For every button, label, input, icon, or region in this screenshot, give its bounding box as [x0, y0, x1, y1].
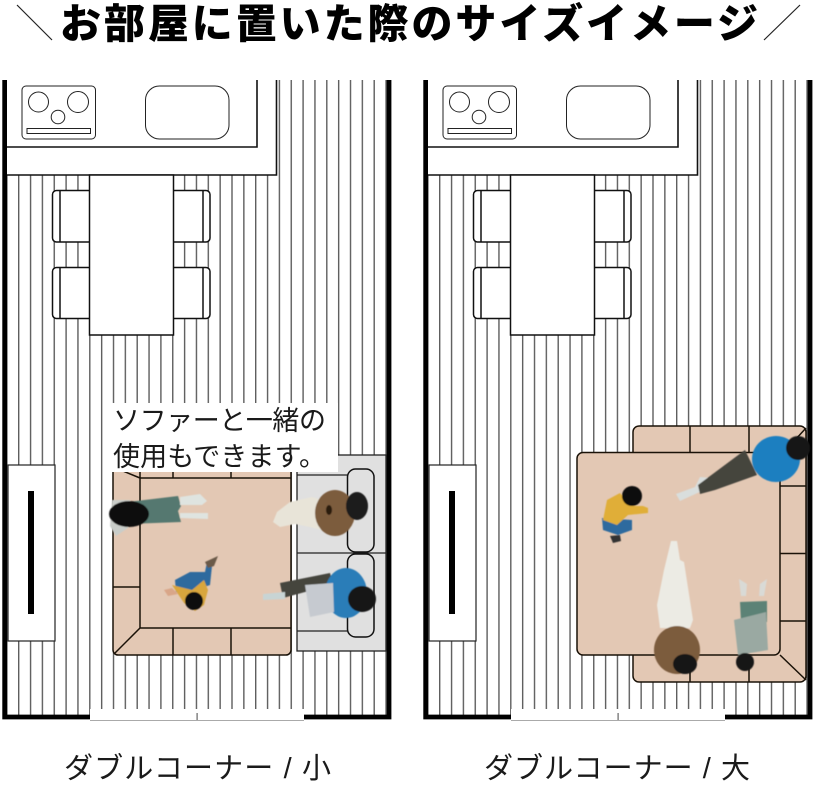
person: woman lying on rug — [109, 494, 208, 536]
tv unit — [8, 465, 55, 641]
kitchen counter — [7, 80, 276, 175]
panel: floor plan large — [426, 80, 810, 721]
dining table — [510, 175, 594, 335]
person: woman on sofa — [273, 490, 368, 536]
person: child on large rug — [602, 486, 648, 543]
dining chairs — [52, 190, 210, 318]
kitchen counter — [428, 80, 698, 175]
walls — [5, 80, 389, 717]
icon: sink — [566, 86, 650, 139]
caption: small: ダブルコーナー / 小 — [64, 752, 331, 785]
dining table — [90, 175, 174, 335]
callout: ソファーと一緒の — [113, 406, 326, 436]
person: woman lying on large rug — [734, 579, 768, 671]
callout — [109, 403, 338, 472]
dining chairs — [474, 190, 631, 318]
walls — [426, 80, 810, 717]
door opening — [90, 709, 304, 721]
rug: large — [577, 426, 806, 682]
icon: stove — [443, 86, 516, 139]
person: man lying on rug — [676, 436, 810, 501]
tv unit — [429, 465, 476, 641]
person: man on sofa — [263, 568, 376, 618]
panel: floor plan small — [5, 80, 389, 721]
door opening — [511, 709, 725, 721]
floor boards — [7, 80, 387, 715]
sofa — [297, 455, 386, 651]
rug: small — [113, 462, 291, 655]
person: woman sitting on large rug — [654, 541, 700, 674]
caption: large: ダブルコーナー / 大 — [484, 752, 750, 785]
person: child on rug — [164, 556, 218, 611]
icon: stove — [22, 86, 96, 139]
callout: 使用もできます。 — [113, 442, 326, 472]
floor boards — [428, 80, 808, 715]
icon: sink — [146, 86, 229, 139]
title: お部屋に置いた際のサイズイメージ — [60, 1, 758, 47]
